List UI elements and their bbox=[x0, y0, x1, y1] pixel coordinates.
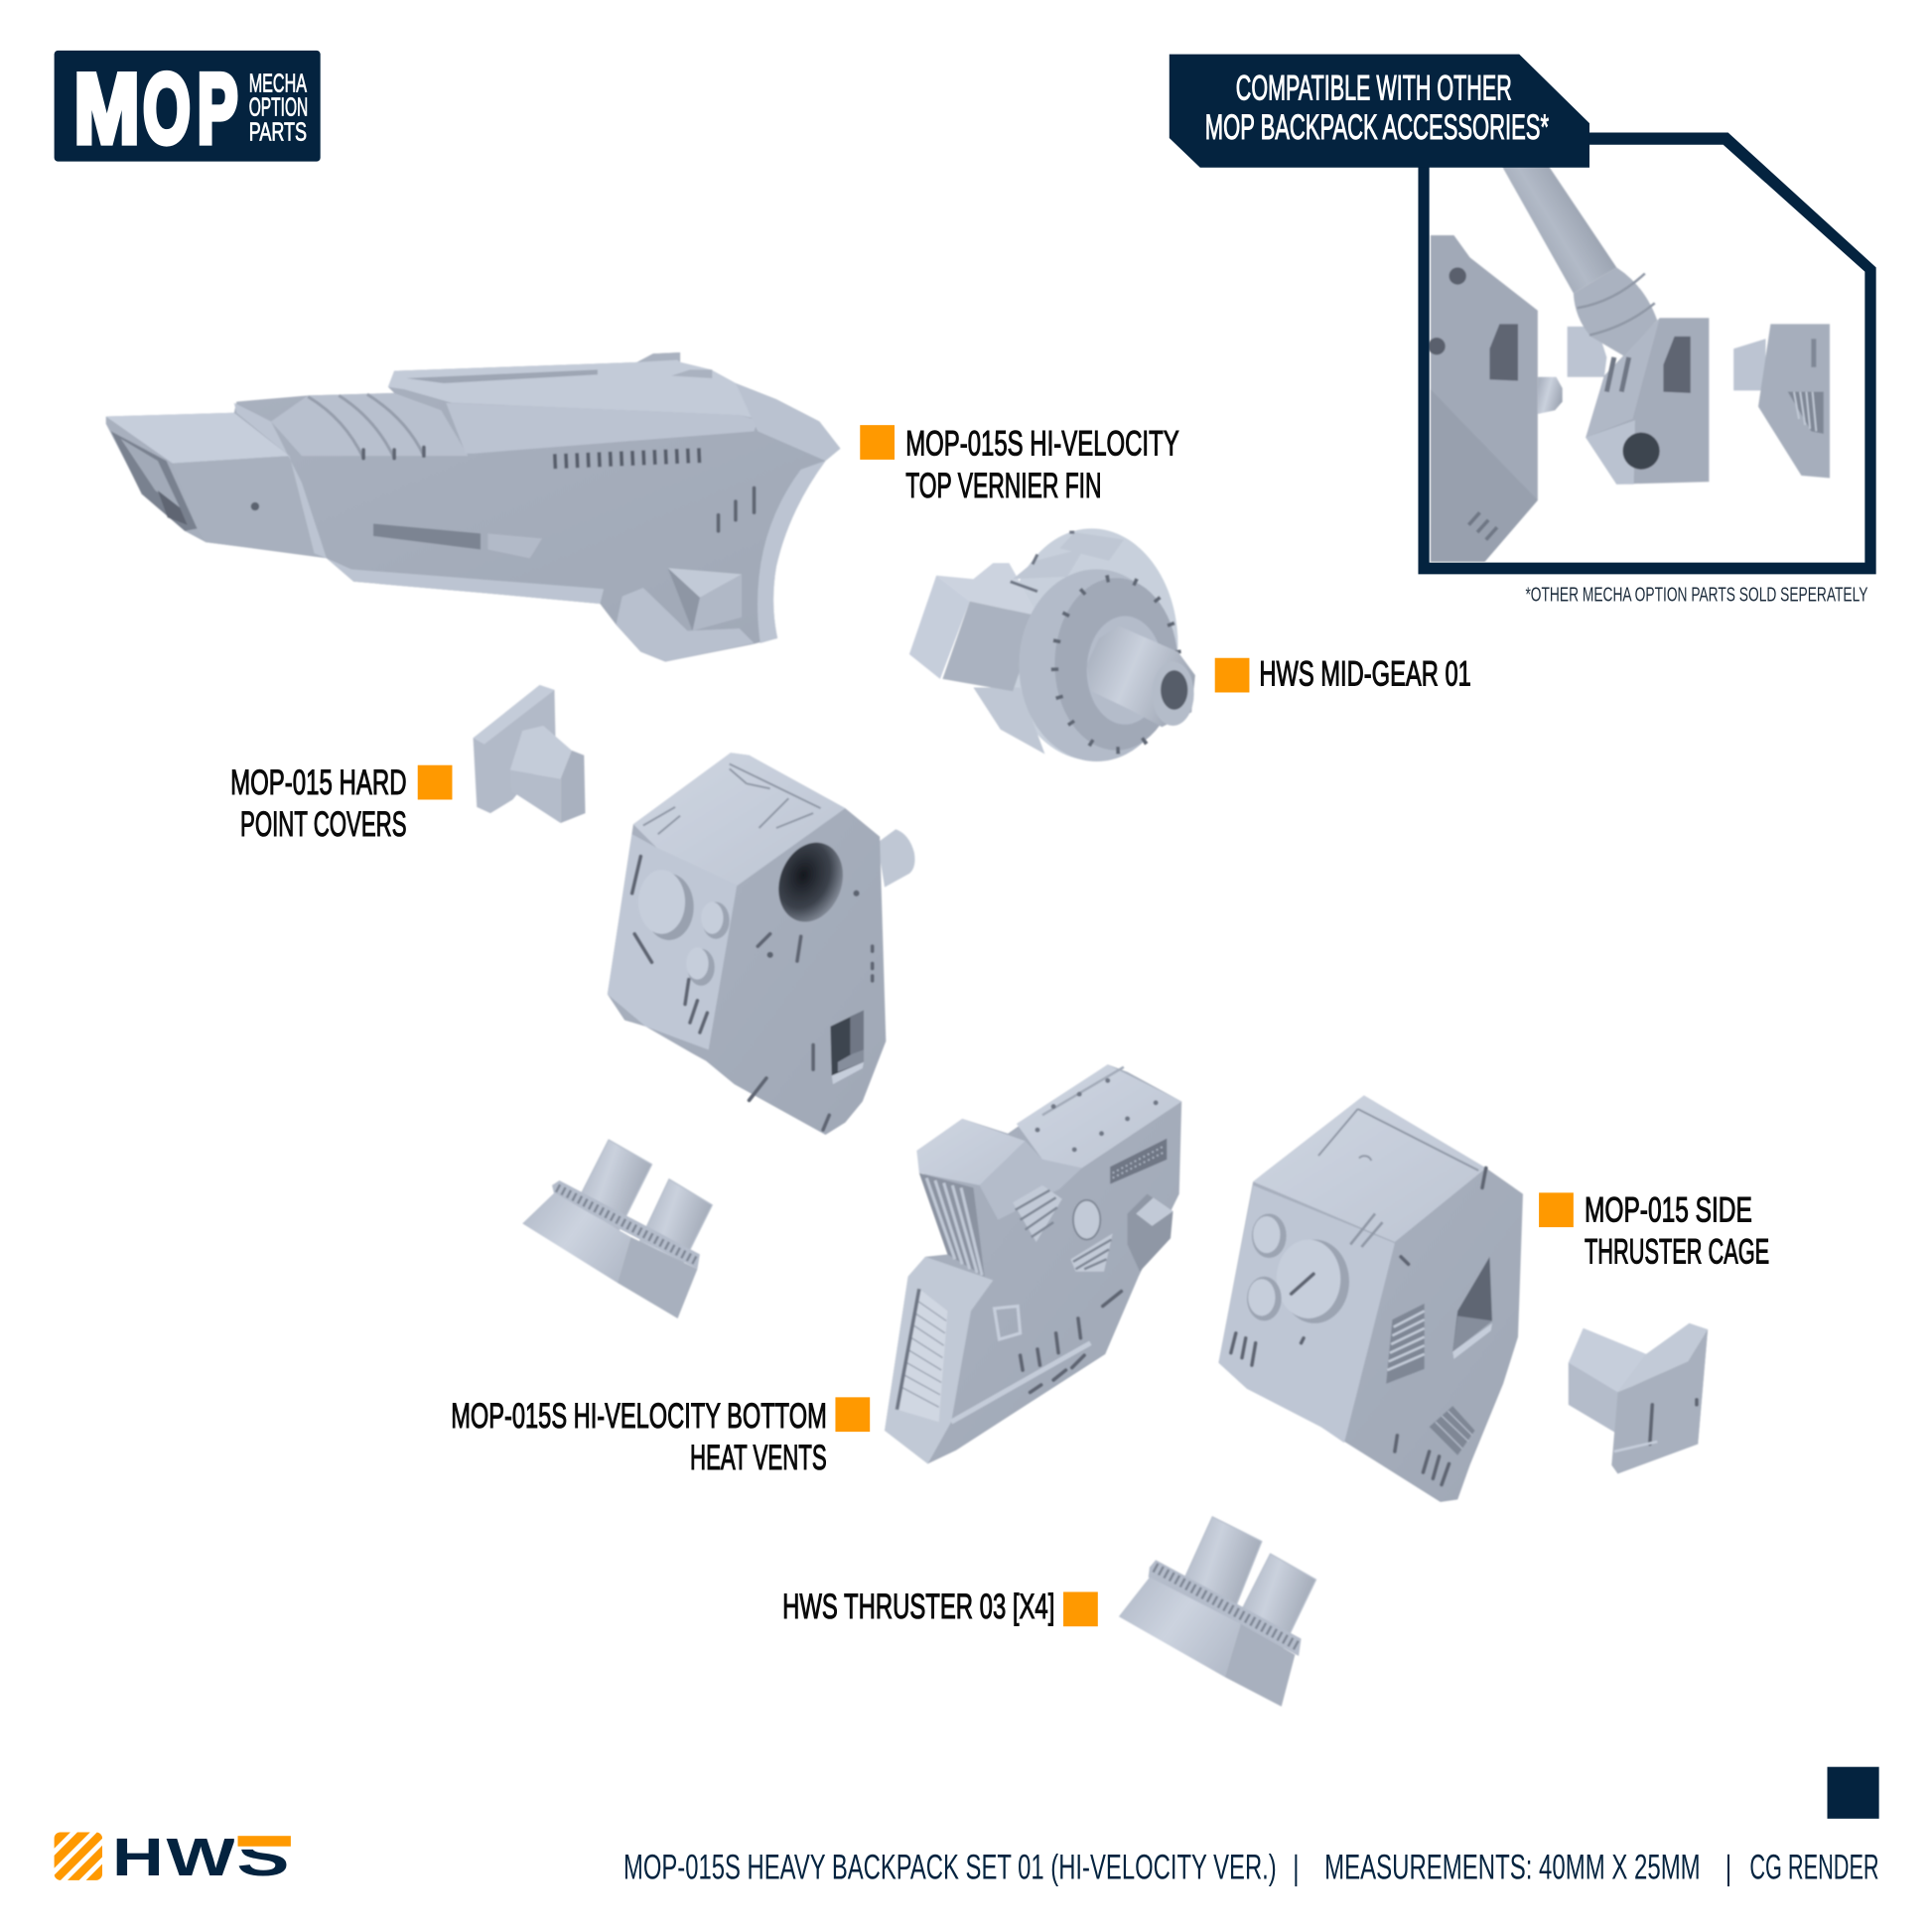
part: large thruster bbox=[1119, 1517, 1315, 1707]
logo: HWS bbox=[52, 1828, 293, 1887]
label: side thruster cage bbox=[1539, 1191, 1769, 1272]
label: hard point covers: MOP-015 HARD bbox=[230, 763, 407, 802]
label: bottom heat vents: HEAT VENTS bbox=[690, 1439, 827, 1477]
label: side thruster cage: MOP-015 SIDE bbox=[1585, 1191, 1752, 1230]
logo: MOP mecha option parts: PARTS bbox=[249, 118, 307, 146]
callout: compatibility inset: COMPATIBLE WITH OTHER bbox=[1236, 70, 1512, 108]
label: mid gear bbox=[1215, 655, 1471, 694]
logo: MOP mecha option parts: P bbox=[198, 53, 238, 164]
part: mid gear bbox=[909, 528, 1195, 761]
inset frame bbox=[1418, 133, 1876, 574]
part: central backpack bbox=[608, 753, 914, 1135]
logo: HWS: W bbox=[167, 1828, 235, 1887]
label: thruster: HWS THRUSTER 03 [X4] bbox=[782, 1587, 1054, 1626]
label: bottom heat vents bbox=[451, 1397, 870, 1477]
label: top vernier fin: TOP VERNIER FIN bbox=[905, 467, 1102, 505]
logo: MOP mecha option parts: MECHA bbox=[249, 69, 307, 97]
banner bbox=[1170, 55, 1589, 168]
label: top vernier fin: MOP-015S HI-VELOCITY bbox=[905, 425, 1179, 464]
footer: product information: MOP-015S HEAVY BACKPACK SET 01 (HI-VELOCITY VER.) bbox=[623, 1850, 1277, 1887]
part: side thruster cage bbox=[1218, 1095, 1523, 1502]
label: hard point covers bbox=[230, 763, 452, 844]
logo: MOP mecha option parts: O bbox=[143, 53, 191, 164]
callout: compatibility inset: MOP BACKPACK ACCESSORIES* bbox=[1205, 109, 1549, 147]
label: hard point covers: POINT COVERS bbox=[240, 805, 407, 844]
part: hard point cover bbox=[474, 685, 586, 823]
logo: HWS: H bbox=[112, 1829, 164, 1887]
logo: MOP mecha option parts bbox=[55, 51, 321, 164]
label: bottom heat vents: MOP-015S HI-VELOCITY BOTTOM bbox=[451, 1397, 827, 1436]
callout: compatibility inset bbox=[1170, 55, 1876, 574]
logo: MOP mecha option parts: M bbox=[73, 55, 140, 164]
part: bottom heat vents bbox=[885, 1064, 1181, 1463]
part: hard point cover right bbox=[1569, 1323, 1708, 1473]
inset artwork bbox=[1428, 144, 1830, 562]
navy square marker bbox=[1828, 1767, 1879, 1819]
logo: MOP mecha option parts: OPTION bbox=[249, 94, 308, 122]
label: mid gear: HWS MID-GEAR 01 bbox=[1259, 655, 1471, 694]
footer: product information: MEASUREMENTS: 40MM X 25MM bbox=[1324, 1850, 1701, 1887]
part: top vernier fin bbox=[106, 352, 840, 661]
label: top vernier fin bbox=[860, 425, 1179, 505]
logo: HWS: S bbox=[236, 1828, 290, 1887]
label: side thruster cage: THRUSTER CAGE bbox=[1585, 1233, 1769, 1272]
part: small thruster bbox=[522, 1140, 712, 1318]
